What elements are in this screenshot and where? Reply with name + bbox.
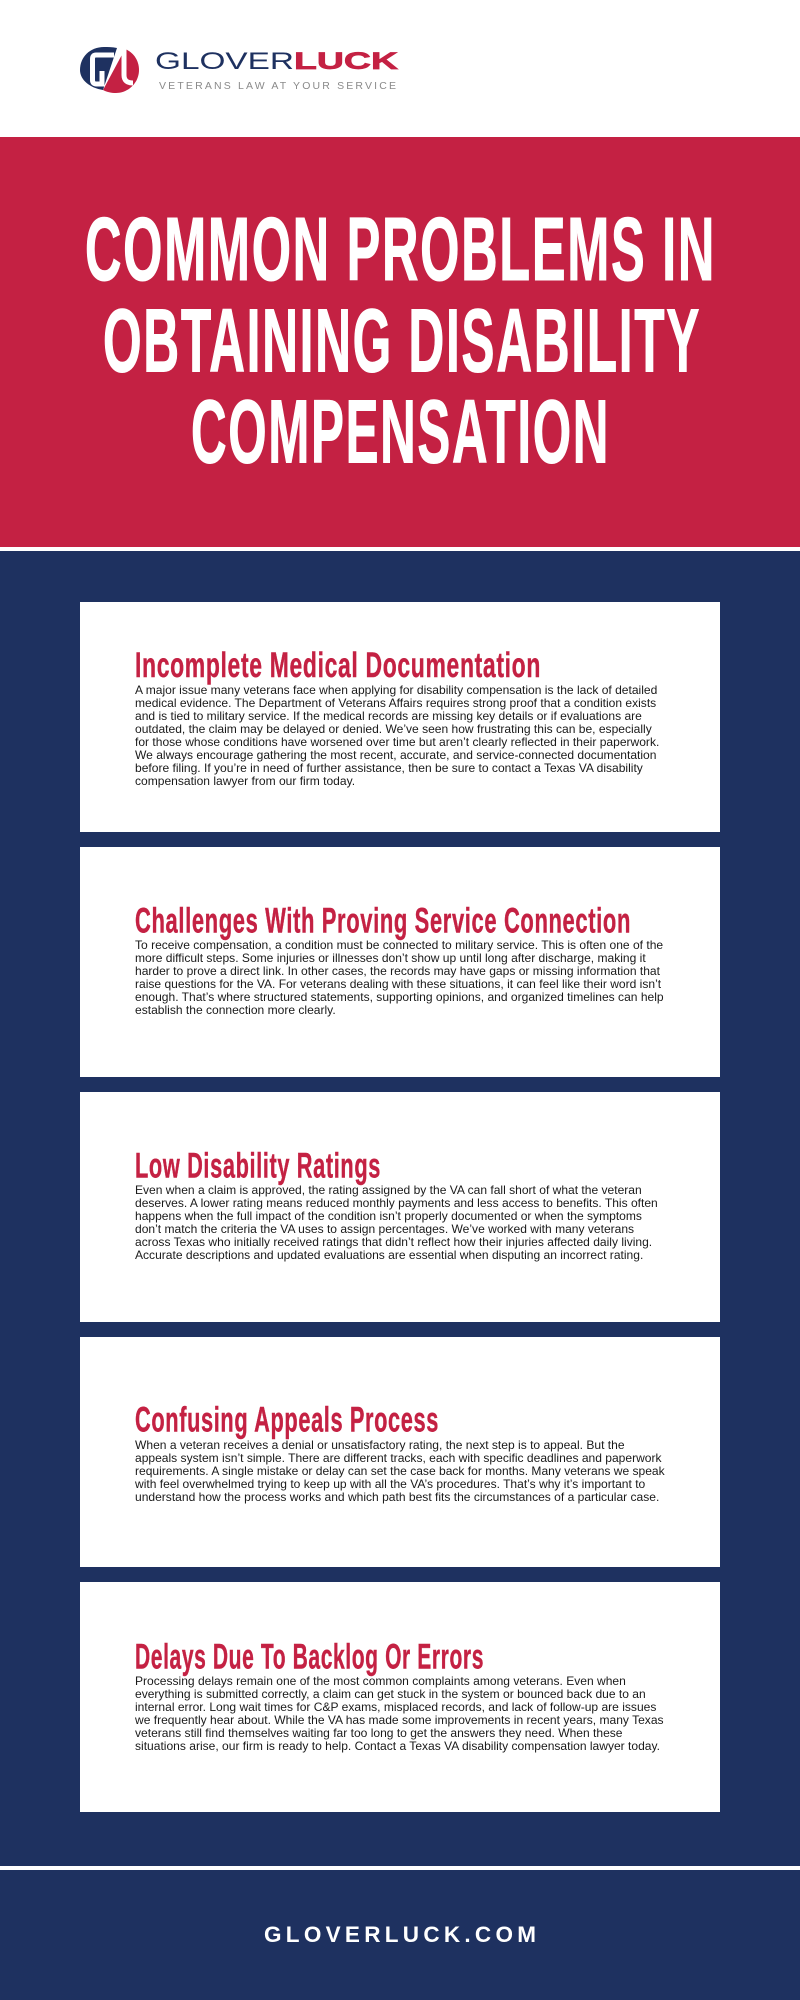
body text: understand how the process works and which path best fits the circumstances of a particular case. xyxy=(135,1490,659,1504)
body text: happens when the full impact of the condition isn’t properly documented or when the symptoms xyxy=(135,1209,642,1223)
panel: delays due to backlog or errors xyxy=(80,1582,720,1812)
body text: Even when a claim is approved, the rating assigned by the VA can fall short of what the veteran xyxy=(135,1183,642,1197)
logo wordmark: LUCK xyxy=(294,48,399,75)
body text: for those whose conditions have worsened over time but aren’t clearly reflected in their paperwork. xyxy=(135,735,659,749)
body text: compensation lawyer from our firm today. xyxy=(135,774,355,788)
heading: Low Disability Ratings xyxy=(135,1147,381,1186)
body text: appeals system isn’t simple. There are different tracks, each with specific deadlines and paperwork xyxy=(135,1451,663,1465)
body text: we frequently hear about. While the VA has made some improvements in recent years, many Texas xyxy=(134,1713,664,1727)
body text: don’t match the criteria the VA uses to assign percentages. We’ve worked with many veterans xyxy=(135,1222,634,1236)
title xyxy=(85,200,716,482)
heading: Delays Due To Backlog Or Errors xyxy=(135,1637,484,1676)
body text: everything is submitted correctly, a claim can get stuck in the system or bounced back due to an xyxy=(135,1687,646,1701)
body text: with feel overwhelmed trying to keep up with all the VA’s procedures. That’s why it’s important to xyxy=(134,1477,646,1491)
body text: requirements. A single mistake or delay can set the case back for months. Many veterans we speak xyxy=(135,1464,666,1478)
heading: Confusing Appeals Process xyxy=(135,1401,439,1440)
body text: outdated, the claim may be delayed or denied. We’ve seen how frustrating this can be, especially xyxy=(135,722,652,736)
body text: veterans still find themselves waiting far too long to get the answers they need. When these xyxy=(135,1726,623,1740)
panel: challenges with proving service connection xyxy=(80,847,720,1077)
body text: more difficult steps. Some injuries or illnesses don’t show up until long after discharge, making it xyxy=(135,951,646,965)
panel: low disability ratings xyxy=(80,1092,720,1322)
panel: confusing appeals process xyxy=(80,1337,720,1567)
body text: We always encourage gathering the most recent, accurate, and service-connected documentation xyxy=(135,748,656,762)
body text: establish the connection more clearly. xyxy=(135,1003,336,1017)
body text: To receive compensation, a condition must be connected to military service. This is often one of the xyxy=(135,938,663,952)
body text: internal error. Long wait times for C&P exams, misplaced records, and lack of follow-up are issues xyxy=(135,1700,656,1714)
footer website: GLOVERLUCK.COM xyxy=(264,1922,536,1947)
logo wordmark xyxy=(155,48,399,75)
body text: situations arise, our firm is ready to help. Contact a Texas VA disability compensation lawyer today. xyxy=(135,1739,660,1753)
body text: A major issue many veterans face when applying for disability compensation is the lack of detailed xyxy=(135,683,657,697)
body text: and is tied to military service. If the medical records are missing key details or if evaluations are xyxy=(135,709,642,723)
body text: deserves. A lower rating means reduced monthly payments and less access to benefits. This often xyxy=(135,1196,658,1210)
panel: incomplete medical documentation xyxy=(80,602,720,832)
logo xyxy=(80,47,399,93)
body text: medical evidence. The Department of Veterans Affairs requires strong proof that a condition exists xyxy=(135,696,656,710)
body text: Accurate descriptions and updated evaluations are essential when disputing an incorrect rating. xyxy=(135,1248,643,1262)
logo tagline: VETERANS LAW AT YOUR SERVICE xyxy=(159,80,396,92)
body text: across Texas who initially received ratings that didn’t reflect how their injuries affected daily living. xyxy=(135,1235,652,1249)
body text: harder to prove a direct link. In other cases, the records may have gaps or missing information that xyxy=(135,964,661,978)
title banner xyxy=(0,137,800,547)
heading: Incomplete Medical Documentation xyxy=(135,646,541,685)
body text: When a veteran receives a denial or unsatisfactory rating, the next step is to appeal. But the xyxy=(135,1438,625,1452)
body text: raise questions for the VA. For veterans dealing with these situations, it can feel like their word isn’t xyxy=(135,977,662,991)
navy content panel xyxy=(0,551,800,1866)
logo wordmark: GLOVER xyxy=(155,48,294,75)
body text: Processing delays remain one of the most common complaints among veterans. Even when xyxy=(135,1674,626,1688)
footer xyxy=(0,1870,800,2000)
icon: GL emblem xyxy=(80,47,139,93)
body text: before filing. If you’re in need of further assistance, then be sure to contact a Texas VA disability xyxy=(135,761,643,775)
body text: enough. That’s where structured statements, supporting opinions, and organized timelines can help xyxy=(135,990,664,1004)
